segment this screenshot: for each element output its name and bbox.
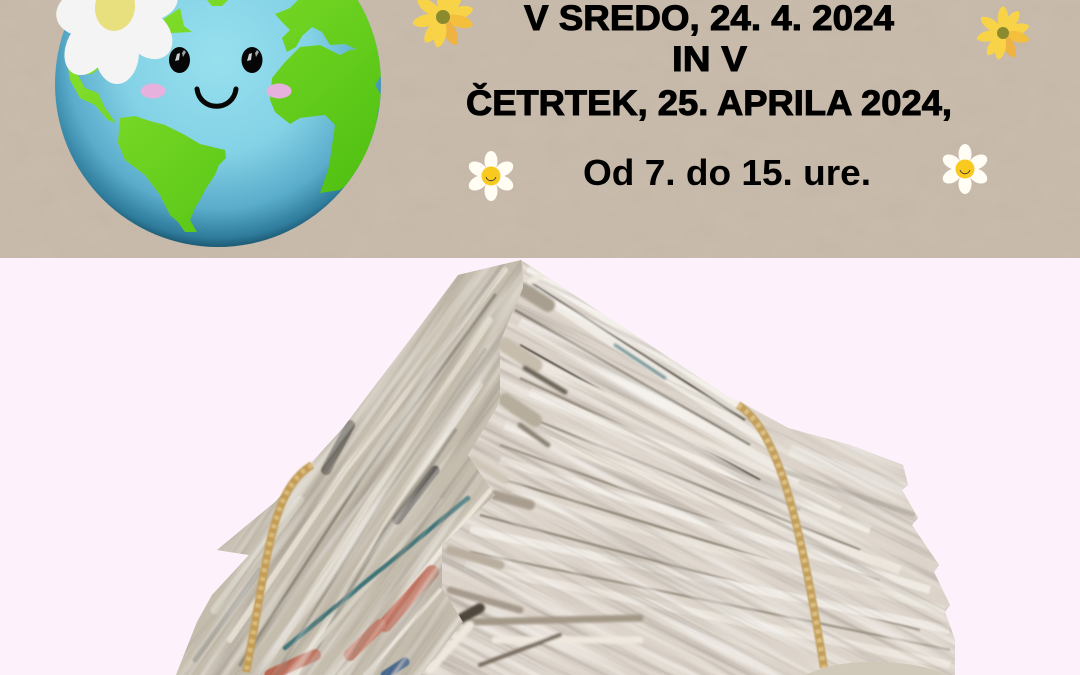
icon: smile: [197, 89, 236, 106]
heading: date line one: V SREDO, 24. 4. 2024: [524, 0, 895, 38]
panel: kraft paper header: [0, 0, 1080, 258]
icon: yellow flower right: [975, 6, 1030, 61]
illustration: tied stack of newspapers: [170, 255, 971, 675]
text: opening hours: Od 7. do 15. ure.: [583, 152, 871, 193]
rope: left: [246, 465, 312, 672]
badge: partly visible kraft circle: [805, 662, 947, 675]
left face of stack: [170, 255, 530, 675]
heading: date line three: ČETRTEK, 25. APRILA 2024,: [466, 83, 952, 123]
right face of stack: [421, 255, 971, 675]
icon: white flower on globe: [52, 0, 182, 84]
icon: daisy left: [466, 151, 516, 201]
icon: cheeks: [140, 84, 292, 98]
icon: eyes: [169, 47, 262, 73]
folded paper ends: [430, 272, 665, 670]
illustration: smiling globe: [52, 0, 385, 247]
icon: yellow flower left: [411, 0, 475, 49]
icon: daisy right: [940, 144, 990, 194]
heading: date line two: IN V: [672, 40, 748, 79]
rope: right: [738, 405, 824, 668]
